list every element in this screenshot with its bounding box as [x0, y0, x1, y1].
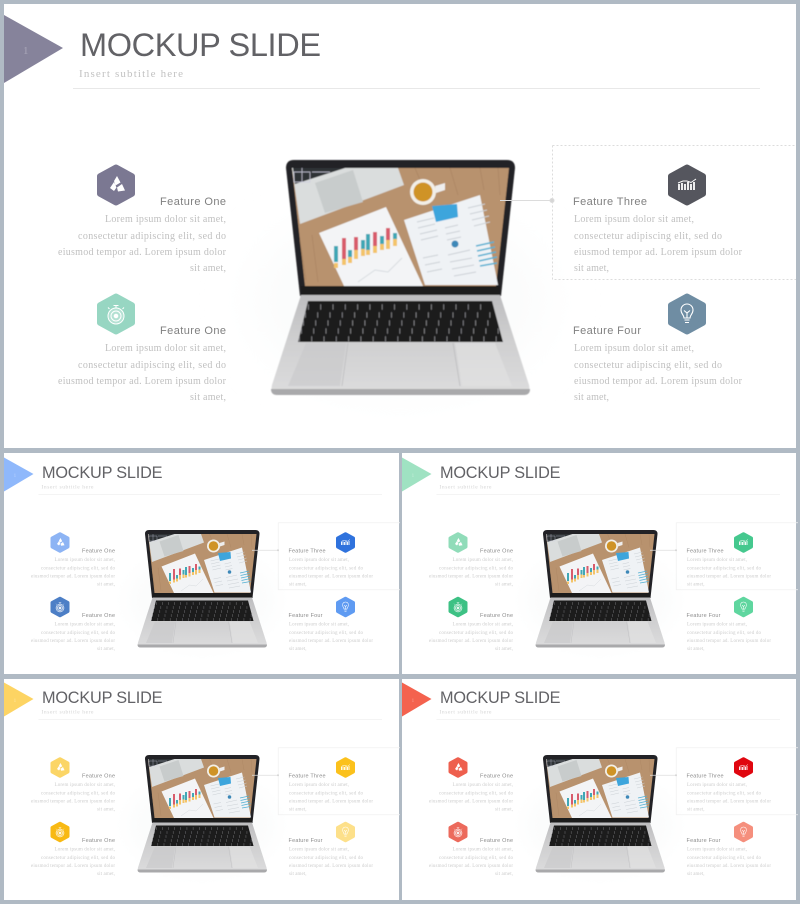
yellow feature: one: sit amet, — [97, 808, 115, 812]
red feature: two: consectetur adipiscing elit, sed do — [439, 856, 514, 861]
slide number triangle: 1 — [23, 45, 28, 57]
laptop mockup — [250, 160, 550, 395]
red feature: four: consectetur adipiscing elit, sed do — [687, 856, 762, 861]
yellow feature: two: sit amet, — [97, 872, 115, 877]
panel: green slide — [402, 453, 798, 674]
yellow slide laptop — [127, 755, 277, 872]
red slide header rule — [436, 718, 780, 721]
green feature: four: sit amet, — [687, 647, 704, 652]
yellow slide number triangle: 1 — [14, 698, 16, 704]
feature: two: eiusmod tempor ad. Lorem ipsum dolor — [58, 376, 227, 387]
feature: two: consectetur adipiscing elit, sed do — [78, 360, 226, 371]
yellow feature: four: Feature Four — [288, 838, 323, 844]
feature: one: Lorem ipsum dolor sit amet, — [105, 214, 226, 225]
red slide laptop — [525, 755, 675, 872]
green feature: four: Feature Four — [686, 613, 721, 619]
feature: two: Feature One — [160, 325, 226, 337]
red feature: four: sit amet, — [687, 872, 704, 877]
yellow feature: three: consectetur adipiscing elit, sed do — [289, 792, 364, 796]
green feature: three — [686, 534, 771, 588]
green feature: four — [686, 598, 771, 652]
blue slide title: MOCKUP SLIDE — [42, 464, 163, 482]
blue feature: three: eiusmod tempor ad. Lorem ipsum dolor — [289, 574, 373, 580]
blue feature: four: eiusmod tempor ad. Lorem ipsum dolor — [289, 639, 373, 644]
green feature: one: Lorem ipsum dolor sit amet, — [452, 558, 513, 563]
red feature: one: Feature One — [480, 774, 513, 780]
blue feature: four: consectetur adipiscing elit, sed do — [289, 631, 364, 636]
slide number triangle — [4, 15, 63, 83]
yellow feature: two: Lorem ipsum dolor sit amet, — [54, 848, 115, 852]
green feature: three: sit amet, — [687, 582, 704, 588]
yellow feature: two — [31, 823, 116, 877]
yellow feature: four: consectetur adipiscing elit, sed do — [289, 856, 364, 861]
yellow feature: three: Lorem ipsum dolor sit amet, — [289, 783, 349, 788]
green feature: four: Lorem ipsum dolor sit amet, — [687, 622, 747, 628]
yellow slide connector and box — [252, 748, 400, 815]
green feature: four: consectetur adipiscing elit, sed do — [687, 631, 762, 636]
blue feature: one — [31, 534, 116, 588]
green feature: three: Lorem ipsum dolor sit amet, — [687, 558, 747, 563]
feature: four: consectetur adipiscing elit, sed do — [574, 360, 722, 371]
red feature: three: Lorem ipsum dolor sit amet, — [687, 783, 747, 788]
green feature: two: consectetur adipiscing elit, sed do — [439, 631, 514, 636]
yellow feature: four: sit amet, — [289, 872, 306, 877]
yellow feature: one: consectetur adipiscing elit, sed do — [41, 792, 116, 796]
yellow feature: one — [31, 759, 116, 812]
feature: four: Lorem ipsum dolor sit amet, — [574, 343, 694, 354]
red feature: two: eiusmod tempor ad. Lorem ipsum dolor — [429, 864, 513, 869]
blue feature: three: sit amet, — [289, 582, 306, 588]
feature: three: Feature Three — [573, 196, 647, 208]
panel: yellow slide — [4, 679, 400, 900]
green slide title: MOCKUP SLIDE — [440, 464, 561, 482]
red feature: three — [686, 759, 771, 812]
red feature: two: sit amet, — [495, 872, 513, 877]
red feature: two — [429, 823, 514, 877]
yellow feature: two: Feature One — [82, 838, 115, 844]
red slide number triangle: 1 — [412, 698, 414, 704]
red feature: one: sit amet, — [495, 808, 513, 812]
yellow feature: four: Lorem ipsum dolor sit amet, — [289, 848, 349, 852]
yellow feature: two: eiusmod tempor ad. Lorem ipsum dolor — [31, 864, 115, 869]
red feature: one — [429, 759, 514, 812]
green slide subtitle: Insert subtitle here — [440, 484, 492, 490]
blue slide laptop — [127, 530, 277, 648]
blue feature: four: Feature Four — [288, 613, 323, 619]
green slide header rule — [436, 493, 780, 496]
yellow slide subtitle: Insert subtitle here — [42, 710, 94, 716]
red slide number triangle — [402, 682, 432, 716]
blue slide header rule — [38, 493, 382, 496]
yellow slide title: MOCKUP SLIDE — [42, 689, 163, 707]
blue feature: three: consectetur adipiscing elit, sed do — [289, 566, 364, 572]
yellow slide header rule — [38, 718, 382, 721]
feature: one: Feature One — [160, 196, 226, 208]
header rule — [73, 88, 760, 89]
blue feature: three — [288, 534, 373, 588]
yellow feature: two: consectetur adipiscing elit, sed do — [41, 856, 116, 861]
blue feature: two: Feature One — [82, 613, 115, 619]
red feature: three: consectetur adipiscing elit, sed do — [687, 792, 762, 796]
blue feature: three: Feature Three — [288, 548, 326, 554]
feature: four — [573, 296, 743, 403]
green slide number triangle — [402, 458, 432, 492]
yellow feature: four: eiusmod tempor ad. Lorem ipsum dolor — [289, 864, 373, 869]
red slide title: MOCKUP SLIDE — [440, 689, 561, 707]
green feature: three: eiusmod tempor ad. Lorem ipsum dolor — [687, 574, 771, 580]
feature: three: eiusmod tempor ad. Lorem ipsum dolor — [574, 247, 743, 258]
green feature: two: eiusmod tempor ad. Lorem ipsum dolor — [429, 639, 513, 644]
yellow feature: three: eiusmod tempor ad. Lorem ipsum dolor — [289, 800, 373, 804]
blue feature: two: consectetur adipiscing elit, sed do — [41, 631, 116, 636]
yellow feature: three: Feature Three — [288, 774, 326, 780]
red feature: one: eiusmod tempor ad. Lorem ipsum dolor — [429, 800, 513, 804]
green feature: one — [429, 534, 514, 588]
green feature: one: Feature One — [480, 548, 513, 554]
green slide number triangle: 1 — [412, 473, 414, 479]
green feature: two: Lorem ipsum dolor sit amet, — [452, 622, 513, 628]
panel: blue slide — [4, 453, 400, 674]
feature: two: sit amet, — [190, 392, 226, 403]
yellow feature: one: Feature One — [82, 774, 115, 780]
blue feature: one: Feature One — [82, 548, 115, 554]
blue feature: two: sit amet, — [97, 647, 115, 652]
red feature: three: Feature Three — [686, 774, 724, 780]
green feature: one: consectetur adipiscing elit, sed do — [439, 566, 514, 572]
blue feature: one: eiusmod tempor ad. Lorem ipsum dolor — [31, 574, 115, 580]
yellow feature: three — [288, 759, 373, 812]
panel: red slide — [402, 679, 798, 900]
blue feature: two: Lorem ipsum dolor sit amet, — [54, 622, 115, 628]
blue feature: four: sit amet, — [289, 647, 306, 652]
subtitle: Insert subtitle here — [79, 68, 183, 80]
red feature: four: eiusmod tempor ad. Lorem ipsum dolor — [687, 864, 771, 869]
red slide subtitle: Insert subtitle here — [440, 710, 492, 716]
blue feature: four: Lorem ipsum dolor sit amet, — [289, 622, 349, 628]
title: MOCKUP SLIDE — [80, 27, 321, 63]
green feature: one: sit amet, — [495, 582, 513, 588]
blue feature: two: eiusmod tempor ad. Lorem ipsum dolor — [31, 639, 115, 644]
green feature: two — [429, 598, 514, 652]
feature: one: sit amet, — [190, 263, 226, 274]
red feature: four: Lorem ipsum dolor sit amet, — [687, 848, 747, 852]
red feature: one: consectetur adipiscing elit, sed do — [439, 792, 514, 796]
feature: three: consectetur adipiscing elit, sed do — [574, 231, 722, 242]
red feature: three: eiusmod tempor ad. Lorem ipsum dolor — [687, 800, 771, 804]
blue slide number triangle — [4, 458, 34, 492]
red feature: four: Feature Four — [686, 838, 721, 844]
green slide laptop — [525, 530, 675, 648]
blue feature: one: consectetur adipiscing elit, sed do — [41, 566, 116, 572]
yellow feature: one: Lorem ipsum dolor sit amet, — [54, 783, 115, 788]
blue feature: two — [31, 598, 116, 652]
feature: three: sit amet, — [574, 263, 609, 274]
green feature: one: eiusmod tempor ad. Lorem ipsum dolor — [429, 574, 513, 580]
green feature: three: Feature Three — [686, 548, 724, 554]
feature: four: Feature Four — [573, 325, 641, 337]
feature: two: Lorem ipsum dolor sit amet, — [105, 343, 226, 354]
panel: main slide — [4, 4, 796, 448]
blue slide subtitle: Insert subtitle here — [42, 484, 94, 490]
feature: four: sit amet, — [574, 392, 609, 403]
yellow feature: four — [288, 823, 373, 877]
red feature: three: sit amet, — [687, 808, 704, 812]
blue feature: one: Lorem ipsum dolor sit amet, — [54, 558, 115, 563]
red slide connector and box — [650, 748, 798, 815]
blue slide connector and box — [252, 523, 400, 590]
green feature: three: consectetur adipiscing elit, sed do — [687, 566, 762, 572]
green feature: two: sit amet, — [495, 647, 513, 652]
yellow feature: three: sit amet, — [289, 808, 306, 812]
connector and dashed box — [500, 146, 796, 280]
yellow slide number triangle — [4, 682, 34, 716]
red feature: one: Lorem ipsum dolor sit amet, — [452, 783, 513, 788]
yellow feature: one: eiusmod tempor ad. Lorem ipsum dolor — [31, 800, 115, 804]
feature: three — [573, 168, 743, 274]
feature: one: eiusmod tempor ad. Lorem ipsum dolor — [58, 247, 227, 258]
blue feature: four — [288, 598, 373, 652]
feature: one — [58, 168, 227, 274]
blue feature: three: Lorem ipsum dolor sit amet, — [289, 558, 349, 563]
red feature: two: Lorem ipsum dolor sit amet, — [452, 848, 513, 852]
green feature: four: eiusmod tempor ad. Lorem ipsum dolor — [687, 639, 771, 644]
red feature: four — [686, 823, 771, 877]
feature: four: eiusmod tempor ad. Lorem ipsum dolor — [574, 376, 743, 387]
green slide connector and box — [650, 523, 798, 590]
feature: three: Lorem ipsum dolor sit amet, — [574, 214, 694, 225]
feature: two — [58, 296, 227, 403]
red feature: two: Feature One — [480, 838, 513, 844]
feature: one: consectetur adipiscing elit, sed do — [78, 231, 226, 242]
green feature: two: Feature One — [480, 613, 513, 619]
blue feature: one: sit amet, — [97, 582, 115, 588]
blue slide number triangle: 1 — [14, 473, 16, 479]
